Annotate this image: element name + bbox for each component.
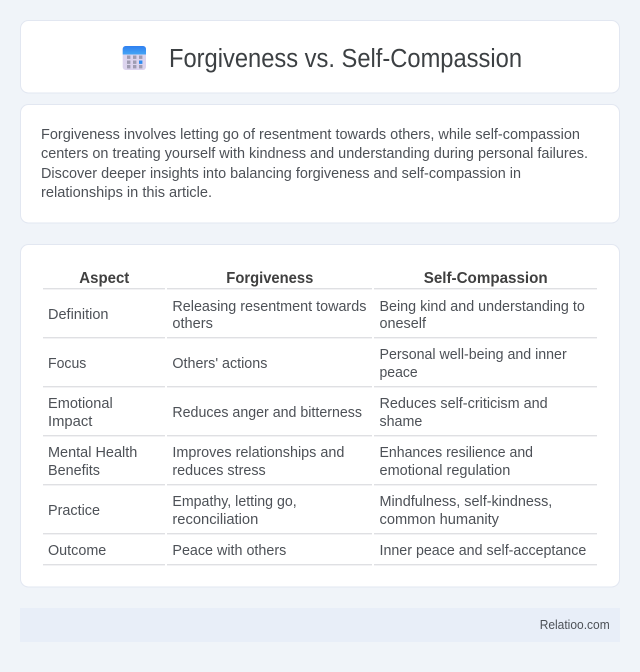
row: practice: common humanity (380, 512, 500, 528)
panel: header (20, 20, 620, 93)
row: practice: Mindfulness, self-kindness, (380, 494, 552, 510)
table header row: Self-Compassion (424, 270, 548, 287)
row: outcome (48, 543, 586, 559)
row: emotional impact: Reduces self-criticism and (380, 396, 548, 412)
text block: summary (41, 127, 588, 201)
row: emotional impact: shame (380, 414, 422, 430)
row: mental health benefits: Mental Health (48, 445, 137, 461)
title: Forgiveness vs. Self-Compassion (169, 45, 522, 73)
text block: summary: Forgiveness involves letting go of resentment towards others, while self-compassion (41, 127, 580, 143)
row: definition: others (172, 316, 213, 332)
row: practice (48, 494, 552, 528)
row: mental health benefits: Benefits (48, 463, 100, 479)
row: practice: reconciliation (172, 512, 258, 528)
row: mental health benefits: reduces stress (172, 463, 266, 479)
row: focus: Others' actions (172, 356, 267, 372)
row: focus (48, 347, 567, 381)
row: outcome: Inner peace and self-acceptance (380, 543, 586, 559)
row: mental health benefits (48, 445, 533, 479)
text block: summary: centers on treating yourself with kindness and understanding during personal failures. (41, 146, 588, 162)
row: focus: Focus (48, 356, 86, 372)
row: definition: Definition (48, 307, 108, 323)
table header row: Aspect (79, 270, 130, 287)
row: mental health benefits: Enhances resilience and (380, 445, 533, 461)
row: practice: Empathy, letting go, (172, 494, 297, 510)
panel: description (20, 104, 620, 223)
row: emotional impact: Reduces anger and bitterness (172, 405, 362, 421)
row: emotional impact (48, 396, 548, 430)
row: outcome: Peace with others (172, 543, 286, 559)
row: definition: Being kind and understanding to (380, 299, 585, 315)
row: emotional impact: Impact (48, 414, 92, 430)
row: mental health benefits: emotional regulation (380, 463, 510, 479)
footer text: Relatioo.com (540, 617, 610, 632)
text block: summary: relationships in this article. (41, 185, 212, 201)
icon: calendar (123, 46, 146, 70)
row: emotional impact: Emotional (48, 396, 113, 412)
footer bar (20, 608, 620, 642)
row: definition (48, 299, 585, 332)
row: outcome: Outcome (48, 543, 106, 559)
row: mental health benefits: Improves relationships and (172, 445, 344, 461)
row: definition: Releasing resentment towards (172, 299, 366, 315)
row: focus: Personal well-being and inner (380, 347, 567, 363)
table header row (79, 270, 548, 287)
panel: comparison table (20, 244, 620, 587)
row: practice: Practice (48, 503, 100, 519)
row: definition: oneself (380, 316, 427, 332)
table header row: Forgiveness (226, 270, 313, 287)
row: focus: peace (380, 365, 418, 381)
text block: summary: Discover deeper insights into balancing forgiveness and self-compassion in (41, 166, 521, 182)
